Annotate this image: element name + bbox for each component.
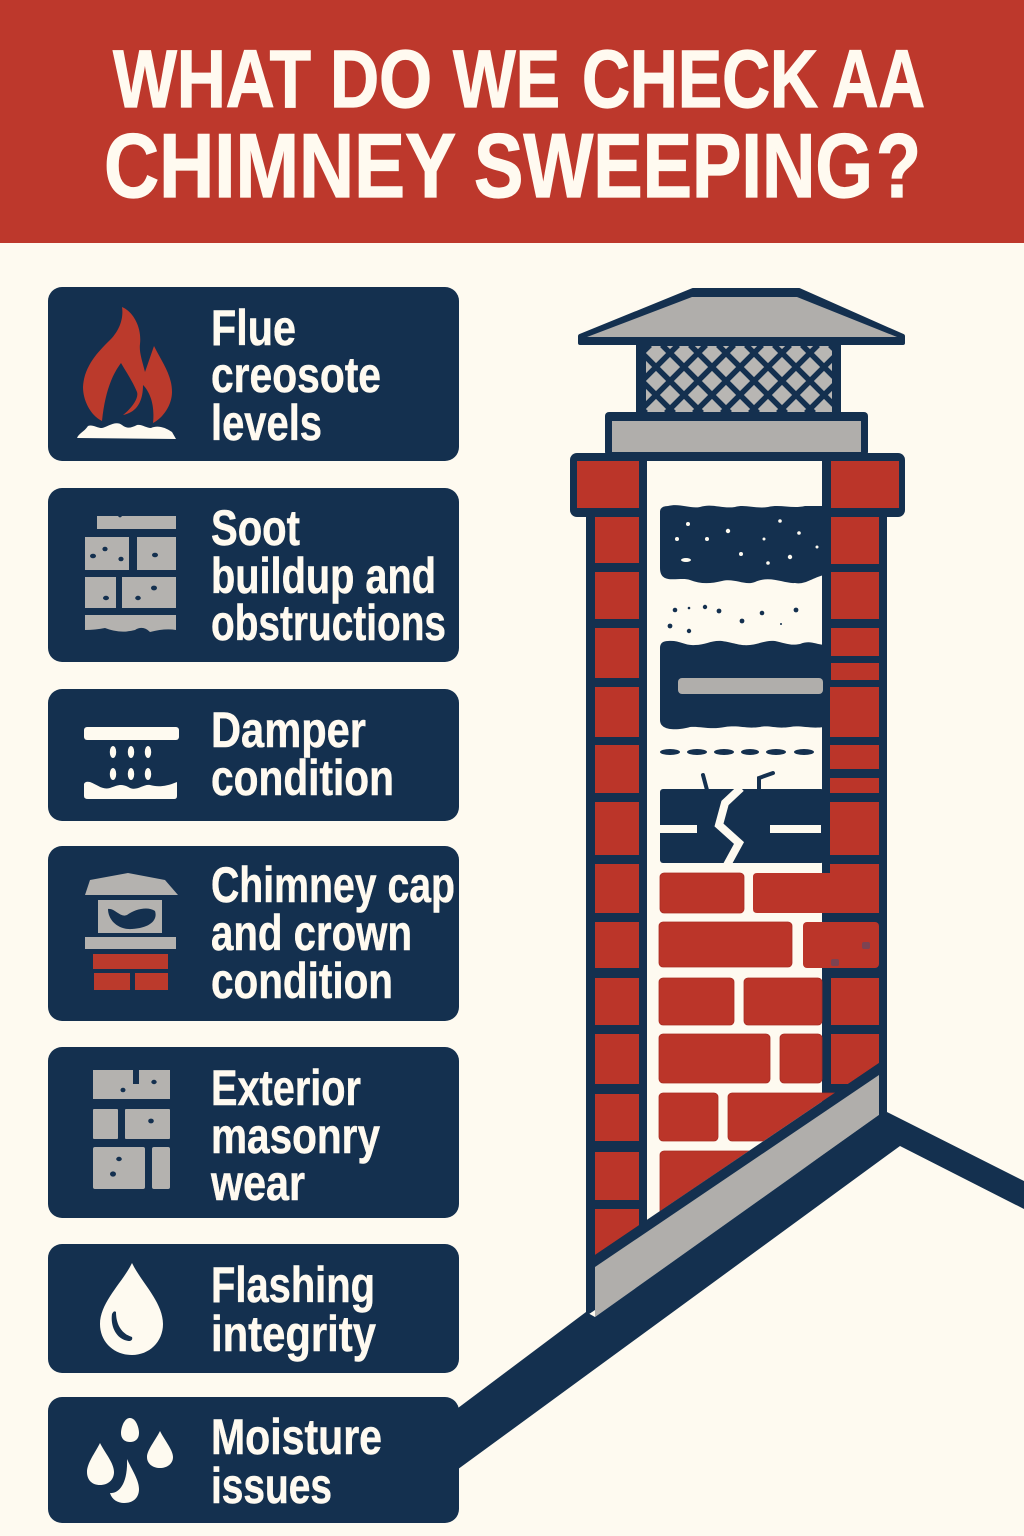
falling soot dots xyxy=(668,605,798,633)
flue interior xyxy=(647,461,822,1241)
title line 1: WE xyxy=(453,34,560,125)
panel: chimney cap and crown condition xyxy=(48,846,459,1021)
icon: flame xyxy=(83,307,172,423)
label: integrity xyxy=(211,1306,376,1362)
label: Exterior xyxy=(211,1060,361,1116)
chimney illustration xyxy=(450,290,1024,1475)
label: and crown xyxy=(211,905,412,961)
roof line xyxy=(450,1112,1024,1475)
label: Damper xyxy=(211,702,366,758)
cracked flue liner xyxy=(660,773,824,865)
left and right wall bricks xyxy=(577,461,899,1259)
title line 2: CHIMNEY xyxy=(104,116,456,217)
title line 1: DO xyxy=(330,34,432,125)
label: condition xyxy=(211,953,393,1009)
chimney stack body xyxy=(586,500,887,1316)
chimney cap xyxy=(580,290,903,343)
label: Flashing xyxy=(211,1257,375,1313)
interior bricks xyxy=(659,864,879,1221)
top brick band xyxy=(570,453,905,517)
label: buildup and xyxy=(211,548,436,604)
label xyxy=(211,500,446,651)
title line 1: CHECK xyxy=(582,34,818,125)
label xyxy=(211,1409,382,1514)
label: Soot xyxy=(211,500,300,556)
label: masonry xyxy=(211,1108,380,1164)
icon: small chimney xyxy=(85,873,178,990)
panel: damper condition xyxy=(48,689,459,821)
icon: damper xyxy=(84,727,179,799)
mortar stains xyxy=(831,942,870,966)
label: Chimney cap xyxy=(211,857,455,913)
title line 2: SWEEPING xyxy=(474,116,873,217)
panel: moisture issues xyxy=(48,1397,459,1523)
navy flashing band xyxy=(586,1058,887,1316)
label: levels xyxy=(211,395,322,451)
panel: flue creosote levels xyxy=(48,287,459,461)
label: Moisture xyxy=(211,1409,382,1465)
chimney crown xyxy=(605,412,868,456)
icon: ash pile xyxy=(77,423,176,439)
label xyxy=(211,857,455,1009)
icon: water drops xyxy=(87,1418,173,1503)
title line 2 xyxy=(104,116,921,217)
label xyxy=(211,1257,376,1362)
label: creosote xyxy=(211,347,381,403)
label: Flue xyxy=(211,300,296,356)
label xyxy=(210,1060,380,1211)
label: obstructions xyxy=(211,595,446,651)
obstruction layer with damper bar xyxy=(660,641,824,729)
icon: sooty bricks xyxy=(85,516,176,632)
dashed line xyxy=(660,749,814,755)
label: condition xyxy=(211,750,394,806)
icon: worn masonry xyxy=(93,1070,170,1189)
panel: soot buildup and obstructions xyxy=(48,488,459,662)
label xyxy=(211,702,394,806)
title line 1: WHAT xyxy=(113,34,311,125)
label xyxy=(211,300,381,451)
title line 1: AA xyxy=(832,34,925,125)
title line 2: ? xyxy=(876,116,921,217)
soot layer with specks xyxy=(660,505,824,583)
header banner xyxy=(0,0,1024,243)
spark arrestor mesh xyxy=(636,345,841,412)
label: issues xyxy=(211,1458,332,1514)
panel: exterior masonry wear xyxy=(48,1047,459,1218)
flashing xyxy=(595,1075,879,1317)
icon: water drop xyxy=(100,1263,163,1355)
title line 1 xyxy=(113,34,925,125)
panel: flashing integrity xyxy=(48,1244,459,1373)
label: wear xyxy=(210,1155,305,1211)
